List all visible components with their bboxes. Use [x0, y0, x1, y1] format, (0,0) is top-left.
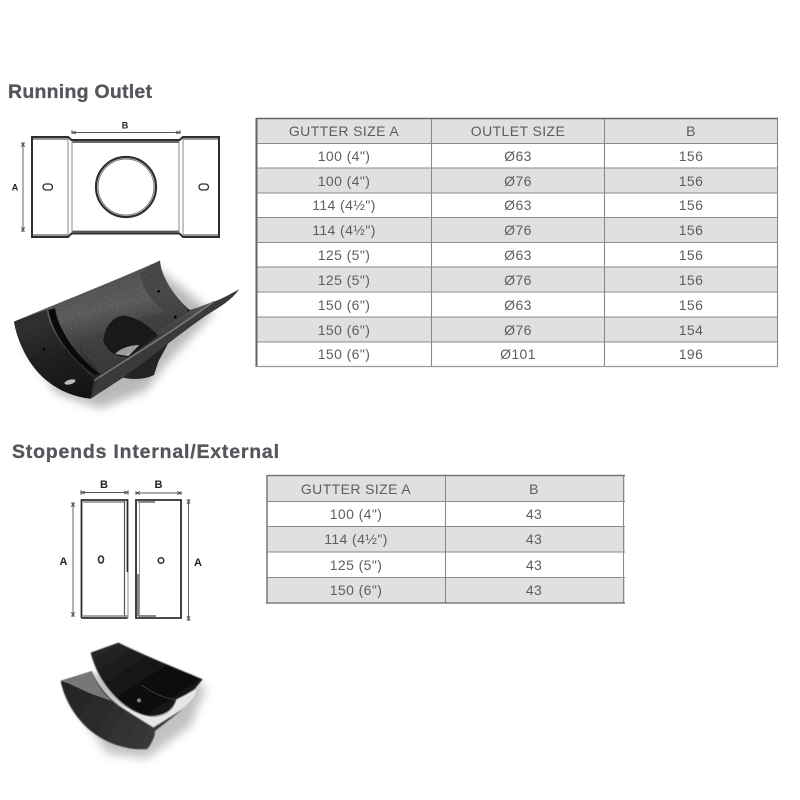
- row 7: 156: [679, 297, 703, 313]
- table row backgrounds: [267, 476, 625, 602]
- dimension line right B: [136, 491, 181, 495]
- outlet opening: [103, 316, 158, 357]
- row 5: 156: [679, 247, 703, 263]
- header row: GUTTER SIZE A: [289, 123, 399, 139]
- row 3: Ø63: [504, 197, 532, 213]
- row 3: 156: [679, 197, 703, 213]
- lip: [91, 289, 239, 399]
- row 3: 43: [526, 557, 542, 573]
- row 6: [318, 272, 703, 288]
- row 1: 43: [526, 506, 542, 522]
- row 7: Ø63: [504, 297, 532, 313]
- row 3: [330, 557, 542, 573]
- row 8: [318, 322, 703, 338]
- icon: left slot: [43, 184, 52, 190]
- slot and holes: [64, 378, 76, 386]
- row 2: 100 (4"): [318, 173, 370, 189]
- row 1: [318, 148, 703, 164]
- diagram: running outlet plan view: [21, 130, 219, 237]
- dimension line left A: [71, 503, 75, 616]
- row 1: [330, 506, 542, 522]
- label right B: B: [155, 479, 163, 491]
- row 5: [318, 247, 703, 263]
- header row: [301, 481, 539, 497]
- row 4: Ø76: [504, 222, 532, 238]
- icon: outlet circle: [96, 157, 156, 217]
- header row: GUTTER SIZE A: [301, 481, 411, 497]
- heading: Running Outlet: Running Outlet: [8, 81, 152, 103]
- row 2: 114 (4½"): [324, 531, 388, 547]
- row 8: 154: [679, 322, 703, 338]
- row 2: Ø76: [504, 173, 532, 189]
- row 1: 100 (4"): [318, 148, 370, 164]
- dimension line left B: [81, 490, 128, 495]
- row 5: Ø63: [504, 247, 532, 263]
- header row: B: [686, 123, 696, 139]
- row 2: [324, 531, 542, 547]
- white gap: [92, 672, 197, 728]
- row 1: Ø63: [504, 148, 532, 164]
- row 2: [318, 173, 703, 189]
- row 2: 43: [526, 531, 542, 547]
- dimension line A: [21, 143, 25, 231]
- row 8: 150 (6"): [318, 322, 370, 338]
- row 1: 156: [679, 148, 703, 164]
- table: stopends sizes: [267, 475, 625, 604]
- row 9: [318, 346, 703, 362]
- row 2: 156: [679, 173, 703, 189]
- left hole: [98, 556, 104, 563]
- dark band: [48, 308, 100, 375]
- label left B: B: [100, 479, 108, 491]
- gutter body: [14, 261, 239, 399]
- row 9: 150 (6"): [318, 346, 370, 362]
- back stopend: [91, 643, 203, 716]
- icon: right slot: [199, 184, 208, 190]
- photo: running outlet gutter: [14, 261, 239, 408]
- table: running outlet sizes: [256, 118, 778, 367]
- row 6: Ø76: [504, 272, 532, 288]
- diagram: stopends plan view: [71, 490, 190, 620]
- label B: B: [122, 120, 129, 130]
- row 4: 156: [679, 222, 703, 238]
- header row: B: [529, 481, 539, 497]
- label left A: A: [60, 556, 68, 568]
- header row: OUTLET SIZE: [471, 123, 565, 139]
- texture: [14, 261, 190, 399]
- row 9: 196: [679, 346, 703, 362]
- photo: stopends: [61, 643, 207, 758]
- dark bottom left shading: [14, 310, 94, 399]
- dimension line B: [72, 130, 180, 134]
- header row: [289, 123, 696, 139]
- label right A: A: [194, 557, 202, 569]
- inner channel shading: [80, 261, 197, 374]
- outlet pipe: [122, 340, 170, 379]
- row 6: 156: [679, 272, 703, 288]
- row 4: 43: [526, 582, 542, 598]
- right stopend: [136, 500, 181, 618]
- row 4: 114 (4½"): [312, 222, 376, 238]
- row 3: [312, 197, 703, 213]
- row 3: 125 (5"): [330, 557, 382, 573]
- row 4: 150 (6"): [330, 582, 382, 598]
- row 6: 125 (5"): [318, 272, 370, 288]
- label A: A: [12, 182, 19, 192]
- row 4: [312, 222, 703, 238]
- row 9: Ø101: [500, 346, 536, 362]
- row 1: 100 (4"): [330, 506, 382, 522]
- row 3: 114 (4½"): [312, 197, 376, 213]
- dimension line right A: [186, 500, 190, 620]
- table row backgrounds: [257, 118, 778, 342]
- front stopend: [61, 671, 183, 749]
- row 5: 125 (5"): [318, 247, 370, 263]
- heading: Stopends Internal/External: Stopends Internal/External: [12, 441, 279, 463]
- row 4: [330, 582, 542, 598]
- row 7: [318, 297, 703, 313]
- left stopend: [82, 500, 128, 618]
- row 8: Ø76: [504, 322, 532, 338]
- row 7: 150 (6"): [318, 297, 370, 313]
- right hole: [158, 558, 164, 563]
